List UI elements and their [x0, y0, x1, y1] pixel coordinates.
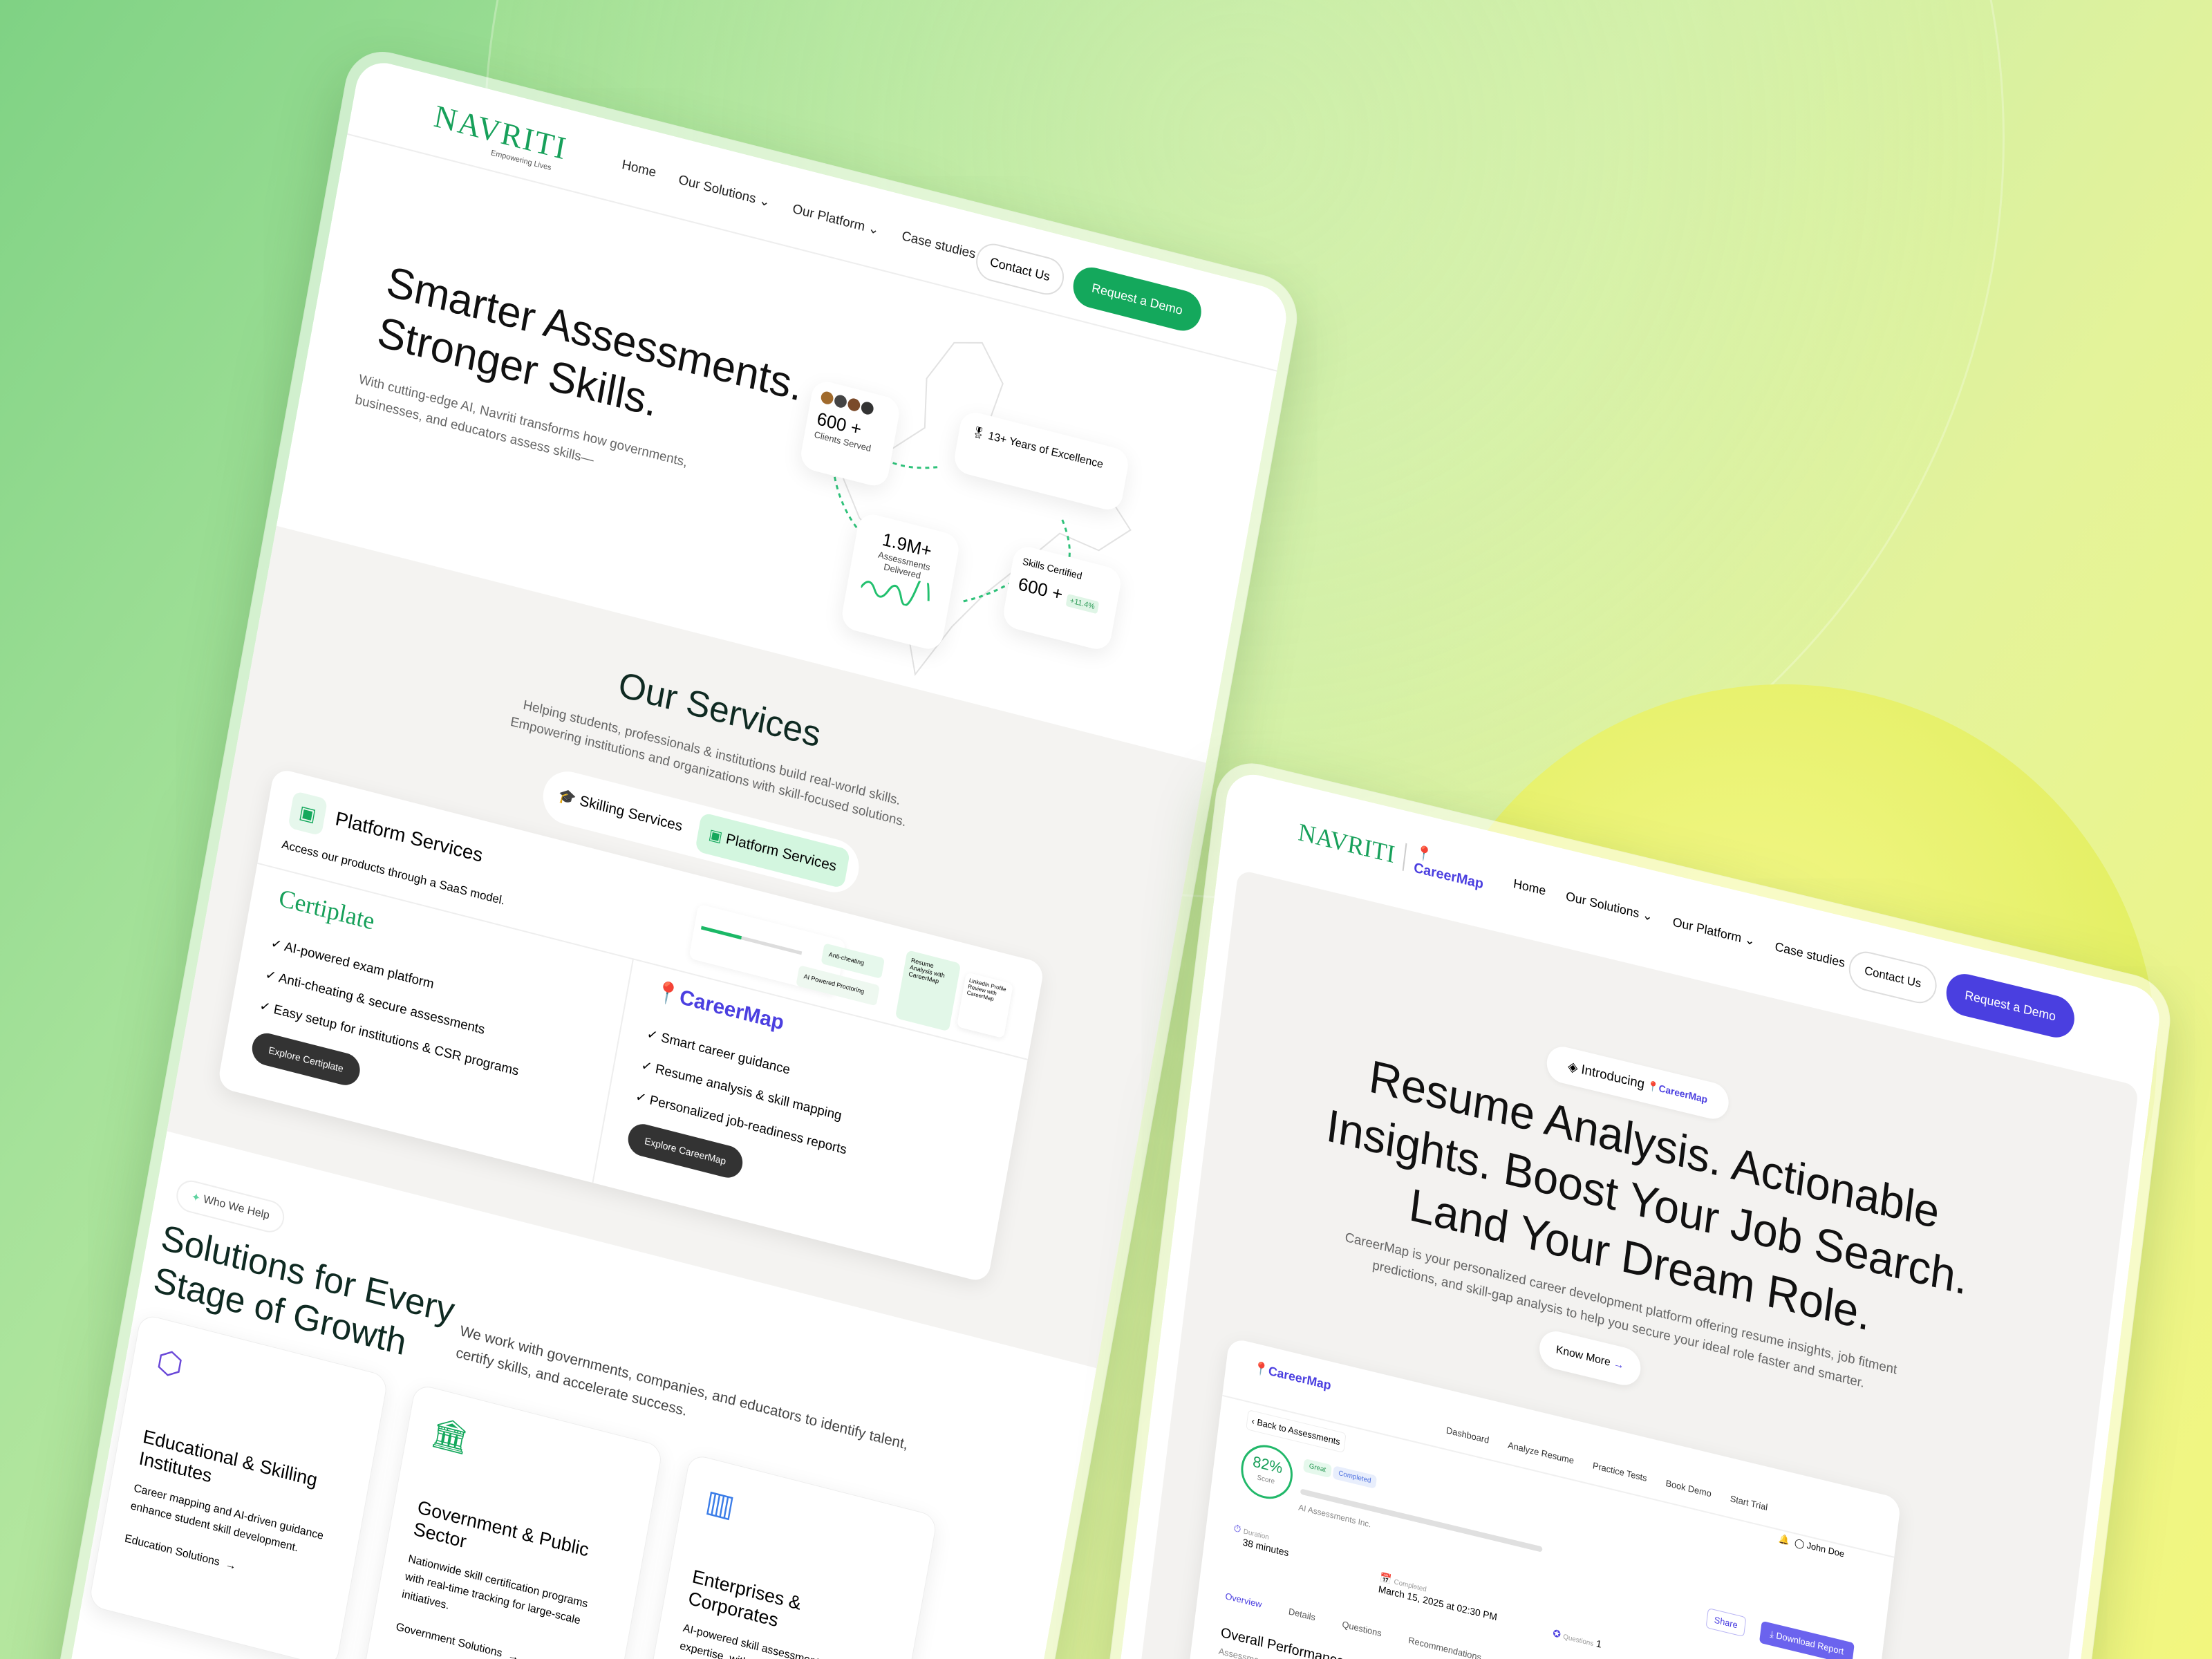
- map of India with stats: [800, 342, 1131, 676]
- mockup thumbnails: AI Powered Proctoring: [803, 973, 865, 995]
- tabs: [539, 766, 863, 898]
- score ring: Score: [1257, 1474, 1275, 1485]
- card: government: [362, 1383, 664, 1659]
- dashboard mockup: Analyze Resume: [1507, 1440, 1575, 1466]
- dashboard mockup: Great Completed: [1309, 1463, 1371, 1485]
- dashboard mockup: Share: [1714, 1615, 1738, 1631]
- hero paragraph: CareerMap is your personalized career development platform offering resume insights, job fitment predictions, and skill-gap analysis to help you secure your ideal role faster and smarter.: [1344, 1230, 1897, 1391]
- introducing pill: 📍CareerMap: [1647, 1079, 1708, 1105]
- hero title: Resume Analysis. Actionable Insights. Boost Your Job Search. Land Your Dream Role.: [1324, 1050, 1971, 1340]
- nav links: Our Solutions ⌄: [677, 173, 771, 210]
- product: Certiplate: ✓ AI-powered exam platform: [270, 936, 435, 992]
- who we help pill: [174, 1177, 287, 1236]
- product: CareerMap: ✓ Resume analysis & skill mapping: [640, 1058, 843, 1123]
- logo: Navriti + CareerMap: NAVRITI: [1297, 818, 1396, 868]
- score ring: 82%: [1252, 1452, 1284, 1477]
- button: request a demo: Request a Demo: [1964, 988, 2056, 1023]
- stat: 600+ clients: 600 +: [816, 408, 863, 440]
- dashboard mockup: Practice Tests: [1592, 1460, 1647, 1483]
- nav links: Home: [621, 158, 657, 180]
- card: enterprises: Enterprises & Corporates: [686, 1566, 803, 1631]
- nav links: Our Platform ⌄: [1672, 915, 1756, 948]
- background yellow disc: [1410, 684, 2157, 1431]
- button: contact us: [1847, 948, 1939, 1007]
- stat: skills certified: 600 + +11.4%: [1017, 573, 1096, 611]
- dashboard mockup: Start Trial: [1730, 1493, 1768, 1512]
- dashboard mockup: ✪ Questions 1: [1552, 1627, 1602, 1650]
- card: enterprises: [636, 1453, 938, 1659]
- score ring: [1238, 1440, 1295, 1504]
- mockup thumbnails: Resume Analysis with CareerMap: [908, 957, 946, 985]
- product: Certiplate: ✓ Anti-cheating & secure assessments: [264, 967, 486, 1038]
- nav links: Our Platform ⌄: [791, 202, 881, 238]
- product: Certiplate: [252, 883, 520, 1085]
- know more button: →: [1613, 1358, 1625, 1372]
- logo: Navriti + CareerMap: 📍CareerMap: [1413, 845, 1484, 892]
- solutions paragraph: We work with governments, companies, and educators to identify talent, certify skills, and accelerate success.: [455, 1323, 909, 1453]
- dashboard mockup: 📅 Completed: [1379, 1571, 1427, 1593]
- product: Certiplate: Certiplate: [276, 883, 377, 935]
- product: CareerMap: Explore CareerMap: [644, 1135, 727, 1167]
- panel: platform services card: Access our products through a SaaS model.: [281, 838, 506, 908]
- nav links: [1512, 877, 1846, 970]
- mockup thumbnails: Anti-cheating: [828, 950, 865, 966]
- navbar: Case studies: [901, 229, 977, 262]
- tabs: 🎓 Skilling Services: [557, 787, 684, 834]
- dashboard mockup: 📍CareerMap: [1253, 1360, 1332, 1392]
- nav links: [621, 158, 977, 262]
- button: contact us: Contact Us: [989, 254, 1051, 283]
- navbar: [347, 57, 1299, 374]
- dashboard mockup: Overview: [1225, 1591, 1262, 1610]
- who we help pill: Who We Help: [203, 1193, 270, 1221]
- stat: 1.9M+ assessments: 1.9M+: [881, 529, 933, 561]
- card: educational: Education Solutions →: [124, 1533, 237, 1573]
- button: contact us: [973, 240, 1067, 299]
- device: CareerMap website: [1094, 755, 2175, 1659]
- who we help pill: ✦: [190, 1191, 201, 1205]
- card: educational: ⬡: [154, 1344, 186, 1383]
- card title: Platform Services: [334, 807, 485, 866]
- services subtitle: Helping students, professionals & institutions build real-world skills.: [522, 698, 901, 808]
- section: our services (gray): [167, 526, 1214, 1370]
- dashboard mockup: ⏱ Duration: [1233, 1522, 1269, 1541]
- background sphere: [484, 0, 2005, 899]
- card: educational: Educational & Skilling Institutes: [138, 1426, 319, 1490]
- services subtitle: Empowering institutions and organizations with skill-focused solutions.: [509, 715, 908, 830]
- nav links: Home: [1512, 877, 1546, 898]
- product: Certiplate: Explore Certiplate: [268, 1044, 344, 1074]
- logo: Navriti: Empowering Lives: [490, 149, 552, 172]
- product: CareerMap: [628, 980, 847, 1178]
- heading: solutions: Solutions for Every Stage of Growth: [151, 1217, 458, 1363]
- card: government: Government & Public Sector: [412, 1497, 590, 1561]
- stat: 13+ years: 🎖 13+ Years of Excellence: [971, 426, 1104, 471]
- product: CareerMap: ✓ Personalized job-readiness reports: [635, 1089, 847, 1157]
- product: Certiplate: ✓ Easy setup for institutions & CSR programs: [259, 999, 520, 1079]
- hero section gray: [1121, 870, 2139, 1659]
- dashboard mockup: Questions: [1342, 1619, 1382, 1639]
- introducing pill: ◈ Introducing: [1567, 1059, 1645, 1091]
- tabs: ▣ Platform Services: [708, 826, 838, 874]
- card: educational: [88, 1313, 388, 1659]
- button: request a demo: [1944, 970, 2077, 1042]
- device: Navriti website: [20, 43, 1304, 1659]
- stat: 600+ clients: Clients Served: [814, 429, 872, 453]
- dashboard mockup: ⤓ Download Report: [1770, 1629, 1844, 1657]
- hero title: Stronger Skills.: [374, 308, 662, 427]
- dashboard mockup: [1170, 1337, 1902, 1659]
- product: CareerMap: 📍CareerMap: [653, 980, 786, 1035]
- stat: 13+ years: [952, 409, 1131, 513]
- logo: Navriti + CareerMap: [1297, 818, 1484, 892]
- product: CareerMap: ✓ Smart career guidance: [646, 1027, 791, 1078]
- stat: skills certified: Skills Certified: [1022, 556, 1083, 581]
- stat: 1.9M+ assessments: [840, 511, 961, 653]
- mockup thumbnails: [696, 926, 1012, 1038]
- nav links: Our Solutions ⌄: [1565, 889, 1653, 924]
- navbar: [1297, 818, 2074, 1038]
- stat: skills certified: [1001, 543, 1123, 653]
- dashboard mockup: Details: [1288, 1606, 1316, 1622]
- hero title: Smarter Assessments.: [383, 258, 807, 411]
- card: educational: Career mapping and AI-driven guidance enhance student skill development.: [129, 1482, 324, 1554]
- button: request a demo: [1070, 263, 1204, 335]
- dashboard mockup: ‹ Back to Assessments: [1251, 1416, 1341, 1447]
- dashboard mockup: AI Assessments Inc.: [1298, 1502, 1371, 1530]
- hero subtitle: With cutting-edge AI, Navriti transforms how governments, businesses, and educators assess skills—: [354, 372, 688, 470]
- mockup thumbnails: LinkedIn Profile Review with CareerMap: [966, 977, 1006, 1002]
- button: contact us: Contact Us: [1864, 964, 1922, 991]
- dashboard mockup: Book Demo: [1665, 1478, 1712, 1499]
- icon: briefcase: ▣: [298, 801, 318, 826]
- logo: Navriti: NAVRITI: [431, 98, 570, 167]
- card: enterprises: ▥: [703, 1483, 737, 1524]
- card: government: Nationwide skill certification programs with real-time tracking for large-scale initiatives.: [401, 1553, 589, 1627]
- nav links: Case studies: [1774, 939, 1846, 970]
- button: request a demo: Request a Demo: [1091, 281, 1183, 317]
- stat: 600+ clients: [798, 378, 901, 489]
- panel: platform services card: [217, 767, 1045, 1284]
- heading: our services: Our Services: [615, 664, 824, 756]
- know more button: Know More: [1555, 1344, 1611, 1369]
- dashboard mockup: March 15, 2025 at 02:30 PM: [1378, 1583, 1498, 1622]
- dashboard mockup: 🔔 ◯ John Doe: [1779, 1533, 1845, 1559]
- introducing pill: [1545, 1043, 1731, 1123]
- dashboard mockup: 38 minutes: [1242, 1536, 1289, 1558]
- know more button: [1537, 1328, 1642, 1389]
- dashboard mockup: Dashboard: [1445, 1425, 1490, 1445]
- card: government: 🏛: [429, 1414, 472, 1457]
- stat: 1.9M+ assessments: Assessments Delivered: [877, 550, 931, 581]
- icon: briefcase: [288, 791, 328, 836]
